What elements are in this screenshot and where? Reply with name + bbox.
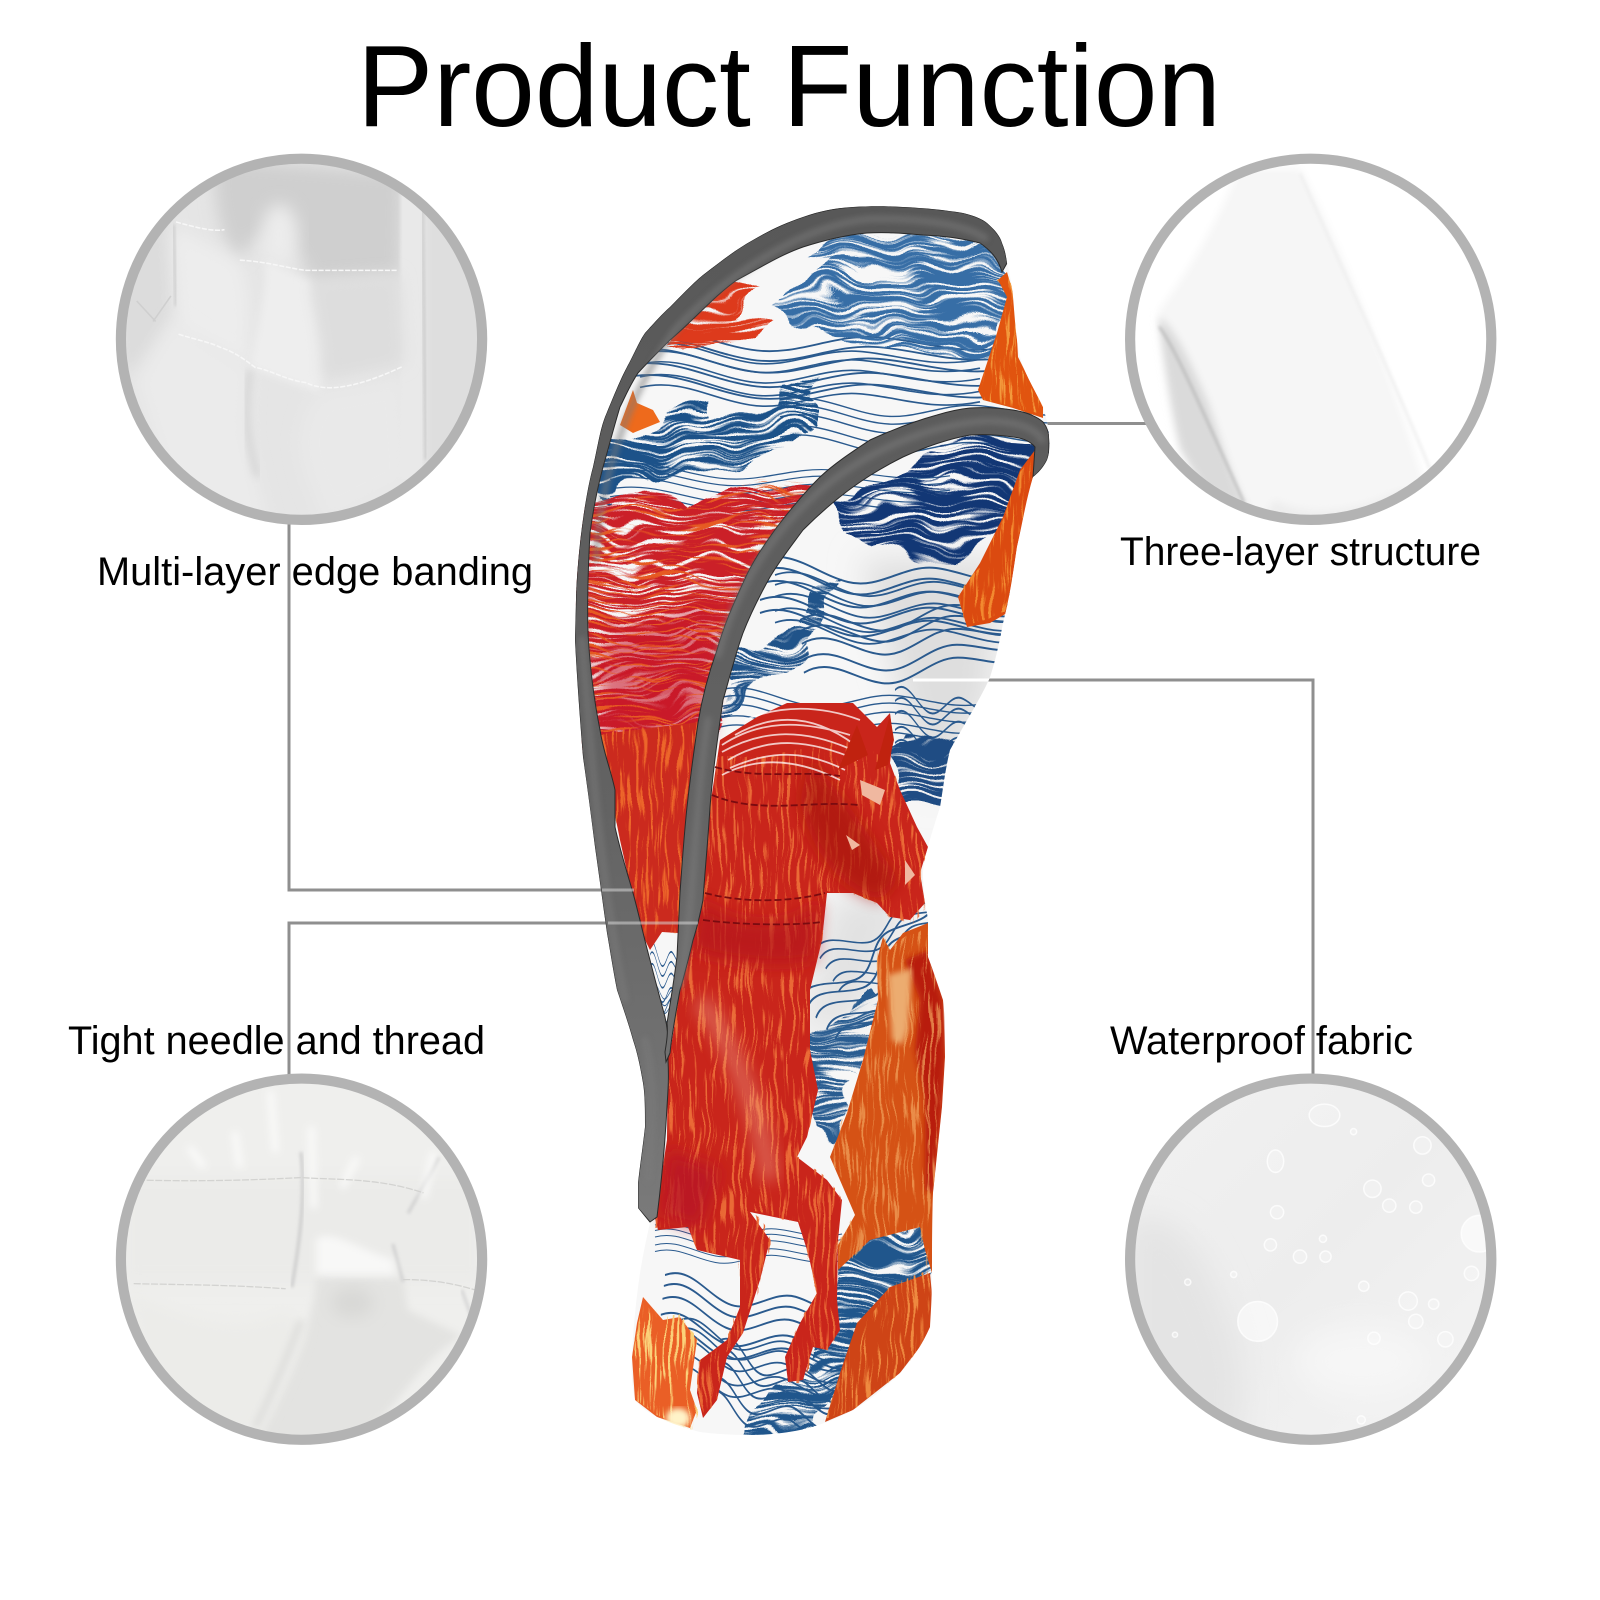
line: three-layer structure	[1047, 422, 1148, 425]
panel: waterproof fabric detail circle	[1127, 1070, 1499, 1443]
white line across product	[913, 678, 990, 682]
fabric base	[600, 422, 1048, 924]
blue hair band: back flap middle	[598, 370, 826, 505]
water droplets	[1172, 1104, 1498, 1424]
horse shading	[690, 900, 820, 964]
trim highlight	[582, 219, 1042, 1180]
blue hair mass: back flap top	[778, 230, 1010, 358]
label: multi-layer edge banding: Multi-layer edge banding	[97, 550, 533, 594]
blue hair: between horses	[805, 995, 882, 1135]
line: tight needle and thread	[289, 923, 608, 1076]
label: waterproof fabric: Waterproof fabric	[1110, 1019, 1413, 1063]
connector lines	[289, 424, 1313, 1076]
orange muzzle: front flap	[958, 450, 1035, 627]
lower orange horse head	[825, 1273, 935, 1422]
flames bottom left	[632, 1297, 697, 1428]
orange horse	[830, 923, 945, 1273]
blue hair band: front flap middle	[722, 574, 846, 705]
label: three-layer structure: Three-layer structure	[1120, 530, 1481, 574]
blue hair: right of horse head	[890, 734, 954, 806]
seam stitches	[703, 767, 858, 924]
red horse flank on back flap	[595, 722, 700, 950]
blue hair: lower right	[743, 1227, 932, 1435]
line: multi-layer edge banding	[289, 523, 602, 890]
red flare at top of flap	[665, 288, 778, 352]
blaze	[888, 968, 912, 1045]
line: waterproof fabric	[988, 680, 1313, 1076]
mane strands	[722, 709, 860, 780]
large red horse	[655, 703, 928, 1418]
title: Product Function	[357, 21, 1221, 151]
blue hair mass: front flap top	[832, 435, 1038, 558]
translucent connector over product	[602, 890, 698, 923]
back trim band	[575, 206, 1007, 1222]
horse ears	[838, 715, 894, 770]
front trim band	[665, 408, 1049, 1062]
product: horse-print head cover	[575, 206, 1050, 1435]
blue flowing lines	[610, 327, 1086, 1447]
orange muzzle: back flap	[978, 272, 1043, 418]
panel: tight needle and thread detail circle	[117, 1070, 490, 1443]
orange patch left edge	[620, 390, 660, 433]
red mane on back flap	[578, 476, 825, 755]
face highlights	[846, 780, 915, 885]
label: tight needle and thread: Tight needle and thread	[68, 1019, 485, 1063]
panel: three-layer structure detail circle	[1127, 153, 1499, 526]
panel: multi-layer edge banding detail circle	[117, 153, 494, 526]
